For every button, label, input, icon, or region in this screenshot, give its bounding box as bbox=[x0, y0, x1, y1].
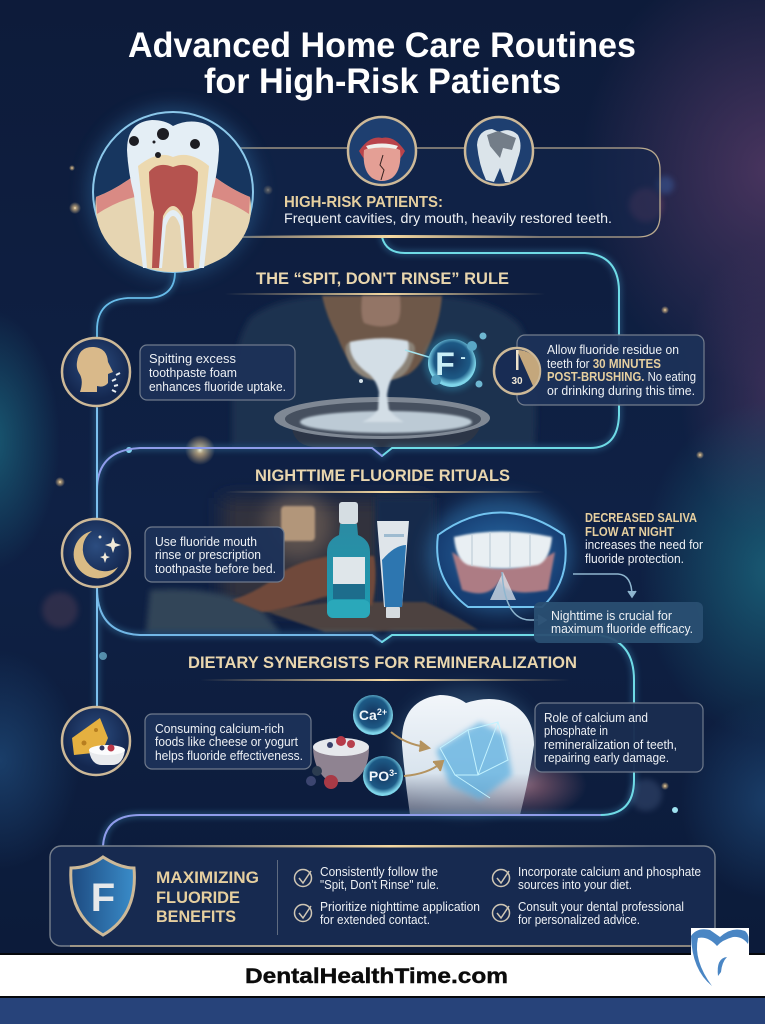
callout: calcium and phosphate role: phosphate in bbox=[544, 723, 608, 738]
checklist: "Spit, Don't Rinse" rule. bbox=[320, 877, 439, 892]
footer band bbox=[0, 953, 765, 1024]
icon: cheese and yogurt bbox=[62, 707, 130, 775]
heading: maximizing fluoride benefits: FLUORIDE bbox=[156, 888, 240, 907]
checklist bbox=[294, 864, 701, 927]
scene: bedroom with mouth rinse and toothpaste bbox=[146, 491, 572, 632]
callout: nighttime efficacy: maximum fluoride efficacy. bbox=[551, 621, 693, 636]
checklist: for personalized advice. bbox=[518, 912, 640, 927]
calcium ion: 2+ bbox=[377, 707, 387, 717]
callout: mouth rinse: toothpaste before bed. bbox=[155, 561, 276, 576]
heading: NIGHTTIME FLUORIDE RITUALS bbox=[255, 466, 510, 485]
checklist: sources into your diet. bbox=[518, 877, 632, 892]
icon: moon and stars bbox=[62, 519, 130, 587]
callout: spitting foam: toothpaste foam bbox=[149, 365, 237, 380]
text: decreased saliva: fluoride protection. bbox=[585, 551, 684, 566]
callout: 30 minutes: POST-BRUSHING. No eating bbox=[547, 369, 696, 384]
callout: calcium and phosphate role: remineralization of teeth, bbox=[544, 737, 677, 752]
callout: nighttime efficacy: Nighttime is crucial for bbox=[551, 608, 673, 623]
callout: calcium and phosphate role: repairing early damage. bbox=[544, 750, 669, 765]
yogurt bowl bbox=[306, 736, 369, 789]
icon: fluoride shield bbox=[71, 857, 134, 935]
phosphate ion: PO bbox=[369, 768, 389, 784]
callout: spitting foam bbox=[140, 345, 295, 400]
table bbox=[262, 602, 478, 632]
calcium ion: Ca bbox=[359, 707, 377, 723]
text: decreased saliva bbox=[585, 510, 704, 566]
icon: restored tooth bbox=[465, 117, 533, 185]
callout: 30 minutes bbox=[494, 335, 704, 405]
scene: man spitting foam bbox=[232, 296, 536, 447]
text: decreased saliva: DECREASED SALIVA bbox=[585, 510, 698, 525]
checklist: Incorporate calcium and phosphate bbox=[518, 864, 701, 879]
flow connector lines bbox=[97, 237, 634, 846]
mouth shield with teeth bbox=[428, 497, 572, 613]
text: high-risk description: Frequent cavities, dry mouth, heavily restored teeth. bbox=[284, 210, 612, 226]
callout: nighttime efficacy bbox=[534, 602, 703, 643]
arrows bbox=[502, 572, 636, 625]
text: decreased saliva: increases the need for bbox=[585, 537, 704, 552]
section: dietary synergists bbox=[62, 653, 703, 775]
panel: high-risk patients bbox=[87, 106, 660, 278]
callout: mouth rinse: Use fluoride mouth bbox=[155, 534, 257, 549]
callout: 30 minutes: teeth for 30 MINUTES bbox=[547, 356, 661, 371]
section: spit, don't rinse rule bbox=[62, 269, 704, 406]
text: decreased saliva: FLOW AT NIGHT bbox=[585, 524, 674, 539]
callout: mouth rinse bbox=[145, 527, 284, 582]
icon: fluoride ion: - bbox=[460, 349, 466, 366]
callout: calcium foods: helps fluoride effectiveness. bbox=[155, 748, 303, 763]
icon: person spitting bbox=[62, 338, 130, 406]
title: Advanced Home Care Routines bbox=[128, 26, 636, 65]
heading: THE “SPIT, DON'T RINSE” RULE bbox=[256, 269, 509, 288]
icon: fluoride ion bbox=[405, 332, 486, 391]
icon: timer bbox=[494, 348, 540, 394]
bedside lamp bbox=[264, 491, 332, 559]
callout: calcium and phosphate role bbox=[535, 703, 703, 772]
checklist: for extended contact. bbox=[320, 912, 430, 927]
heading: maximizing fluoride benefits bbox=[156, 868, 259, 926]
section: nighttime fluoride rituals bbox=[62, 466, 704, 643]
text: high-risk description: HIGH-RISK PATIENTS: bbox=[284, 194, 443, 211]
callout: 30 minutes: Allow fluoride residue on bbox=[547, 342, 679, 357]
icon: dry mouth tongue bbox=[348, 117, 416, 185]
heading: maximizing fluoride benefits: MAXIMIZING bbox=[156, 868, 259, 887]
callout: mouth rinse: rinse or prescription bbox=[155, 547, 261, 562]
foam stream bbox=[350, 338, 409, 422]
calcium ion bbox=[353, 695, 393, 735]
scene: yogurt, ions and remineralized tooth bbox=[306, 688, 587, 819]
icon: timer: 30 bbox=[511, 376, 523, 387]
metal basin bbox=[274, 397, 490, 447]
callout: spitting foam: enhances fluoride uptake. bbox=[149, 379, 286, 394]
logo: tooth mark bbox=[691, 928, 749, 986]
sleeve bbox=[146, 589, 280, 632]
mouth rinse bottle bbox=[327, 502, 370, 618]
phosphate ion: 3- bbox=[389, 768, 397, 778]
text: high-risk description bbox=[284, 194, 612, 226]
icon: fluoride shield: F bbox=[91, 876, 115, 920]
title bbox=[128, 26, 636, 101]
callout: calcium foods: foods like cheese or yogurt bbox=[155, 734, 298, 749]
checklist: Prioritize nighttime application bbox=[320, 899, 480, 914]
callout: spitting foam: Spitting excess bbox=[149, 351, 236, 366]
arrows to tooth bbox=[391, 732, 443, 776]
callout: calcium foods bbox=[145, 714, 311, 769]
checklist: Consult your dental professional bbox=[518, 899, 684, 914]
heading: maximizing fluoride benefits: BENEFITS bbox=[156, 907, 236, 926]
phosphate ion bbox=[363, 756, 403, 796]
checklist: Consistently follow the bbox=[320, 864, 438, 879]
callout: calcium foods: Consuming calcium-rich bbox=[155, 721, 284, 736]
panel: maximizing fluoride benefits bbox=[50, 845, 715, 947]
heading: DIETARY SYNERGISTS FOR REMINERALIZATION bbox=[188, 653, 577, 672]
hand bbox=[232, 555, 376, 612]
callout: calcium and phosphate role: Role of calcium and bbox=[544, 710, 648, 725]
toothpaste tube bbox=[377, 521, 409, 618]
title: for High-Risk Patients bbox=[204, 62, 561, 101]
icon: fluoride ion: F bbox=[435, 346, 455, 382]
callout: 30 minutes: or drinking during this time. bbox=[547, 383, 695, 398]
enamel tooth bbox=[396, 688, 540, 815]
website address: DentalHealthTime.com bbox=[245, 965, 508, 988]
icon: decayed tooth cross-section bbox=[87, 106, 259, 278]
